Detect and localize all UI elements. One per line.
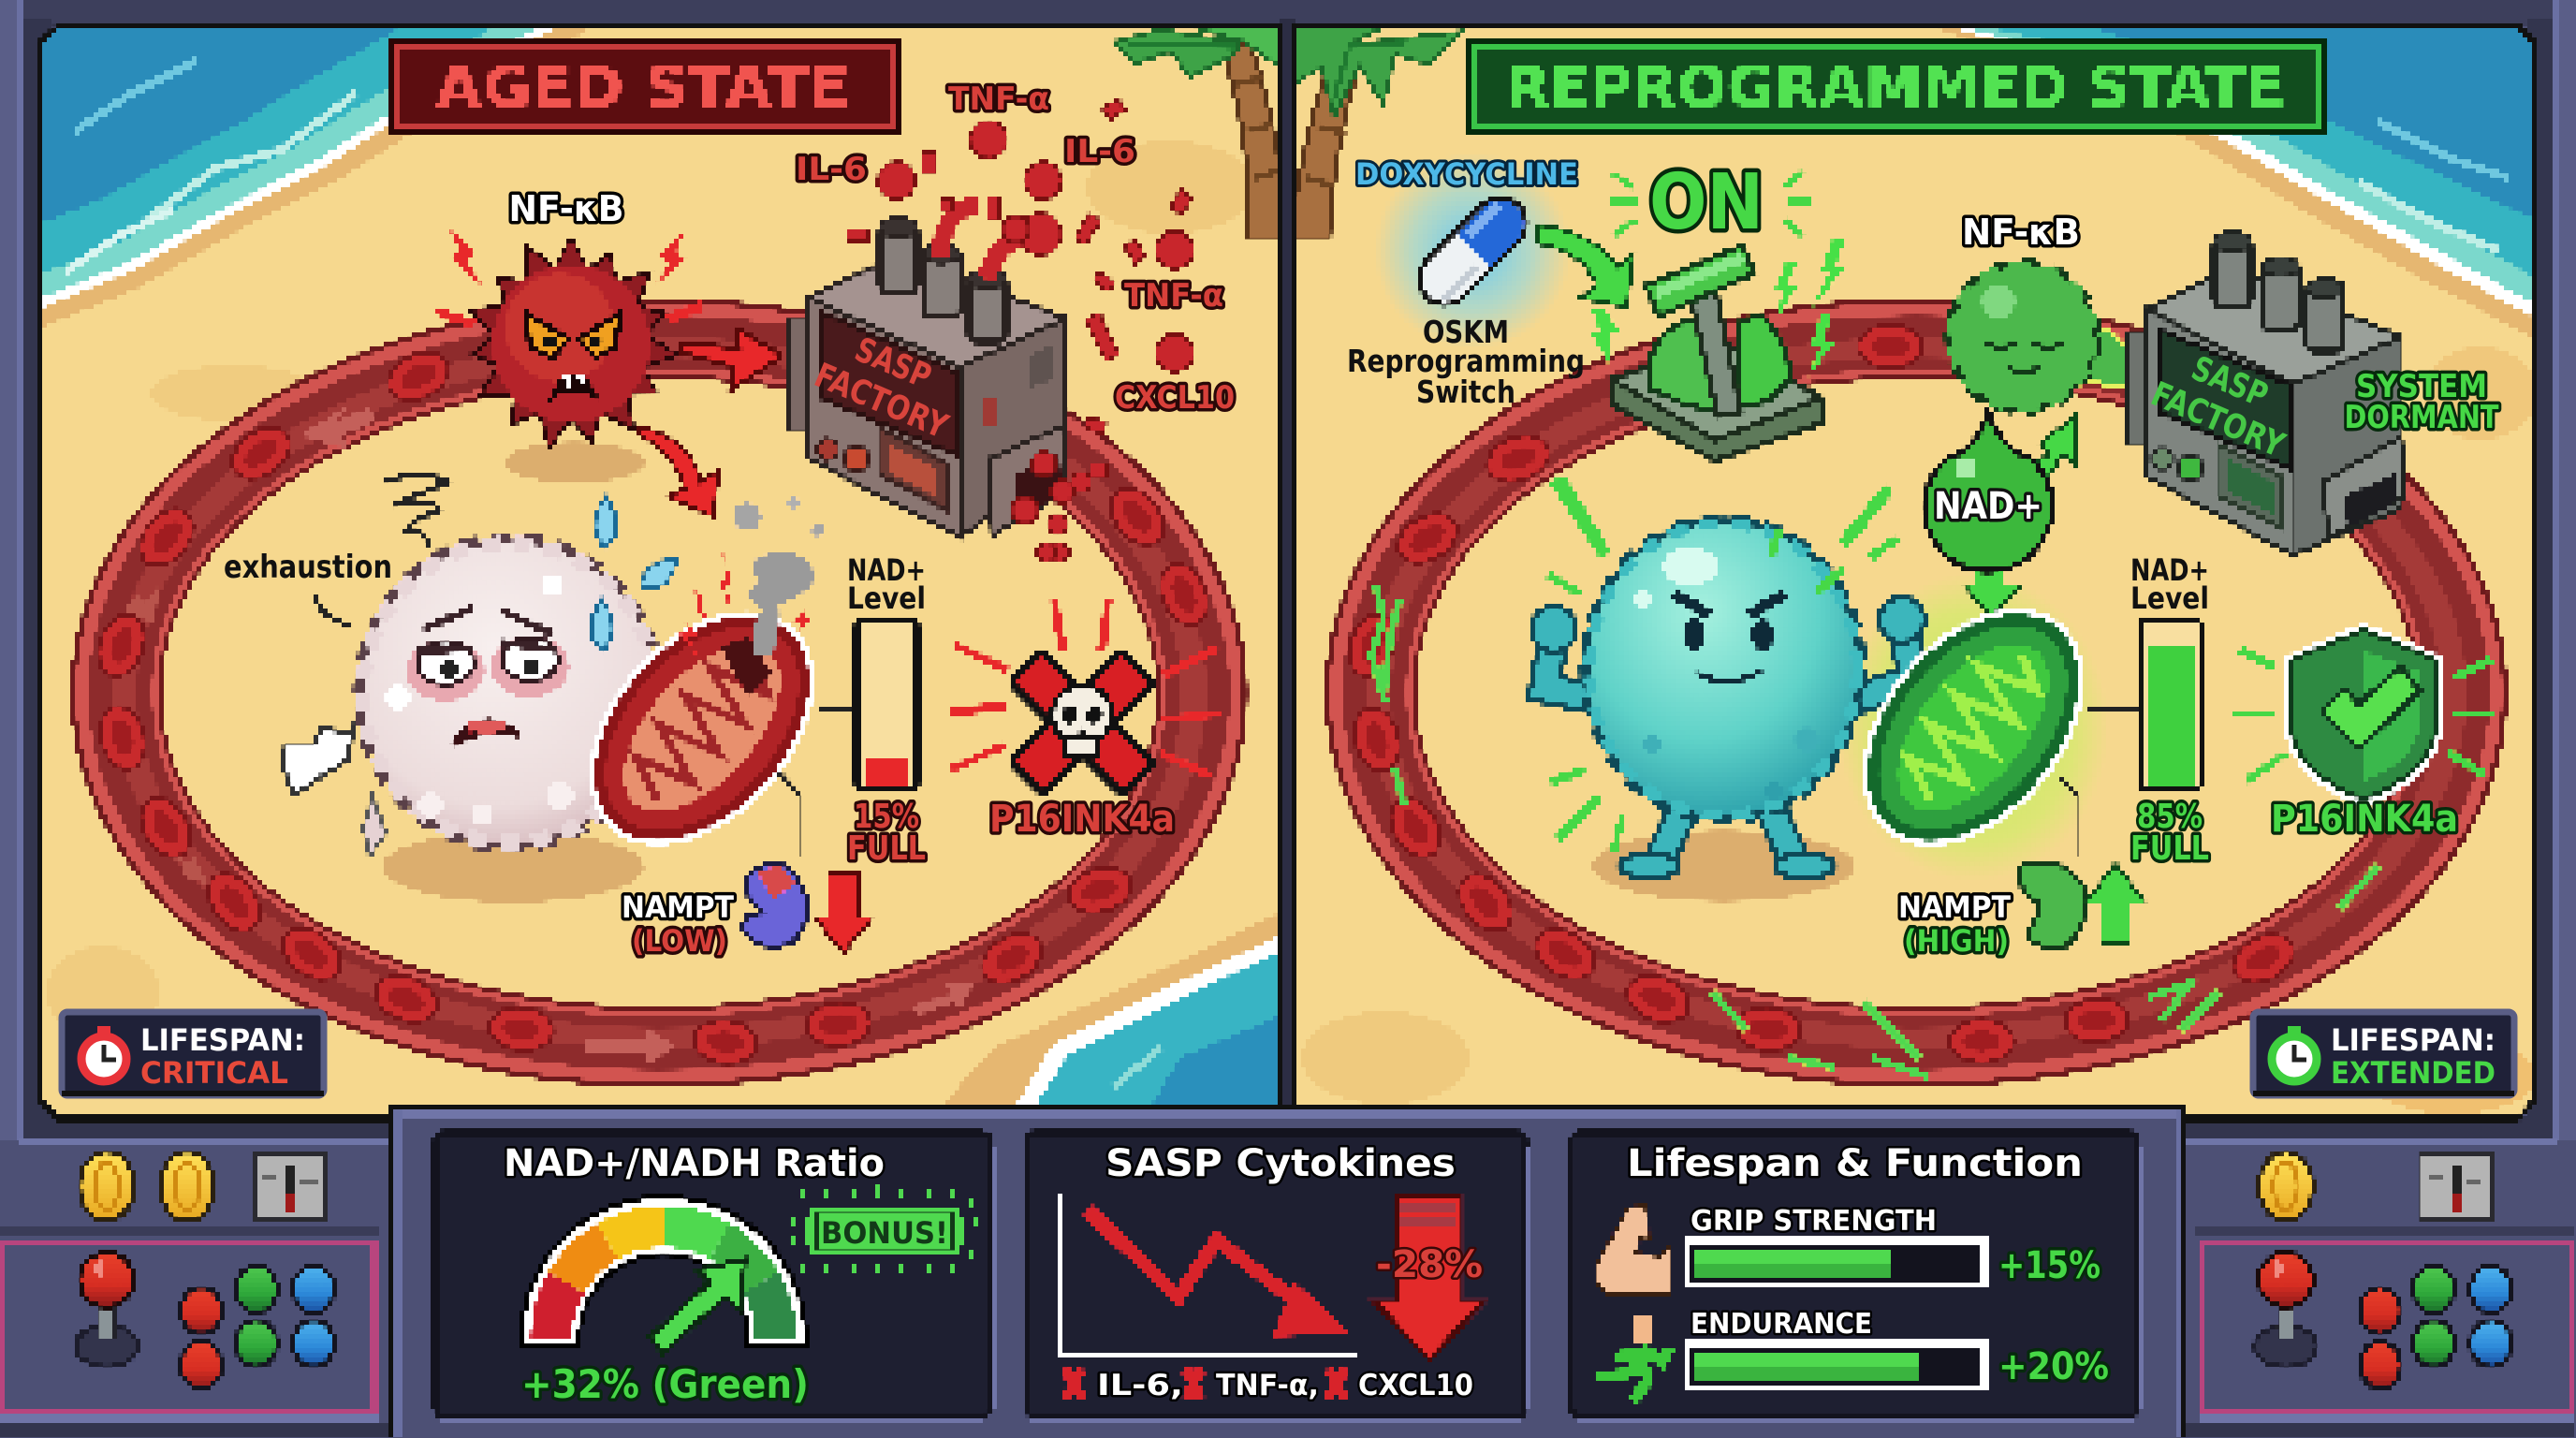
cytokine list: IL-6,: [1097, 1369, 1183, 1402]
label: sasp factory: SASP: [849, 330, 937, 397]
panel title: nad ratio: NAD+/NADH Ratio: [504, 1142, 885, 1185]
badge: lifespan extended: LIFESPAN:: [2331, 1022, 2496, 1058]
cytokine labels: TNF-α: [1124, 277, 1223, 315]
teal healthy cell: [1531, 517, 1925, 902]
label: sasp factory dormant: FACTORY: [2145, 375, 2291, 465]
nad level bar reprogrammed: [2088, 620, 2201, 789]
label: doxycycline: DOXYCYCLINE: [1355, 156, 1578, 192]
label: sasp factory: FACTORY: [809, 357, 954, 447]
label: nad level reprogrammed: NAD+: [2130, 552, 2209, 588]
label: system dormant: [2344, 368, 2499, 436]
label: oskm reprogramming switch: [1347, 314, 1585, 410]
coin: [2259, 1152, 2313, 1221]
on rays: [1611, 169, 1812, 239]
label: nampt low: NAMPT: [622, 889, 734, 925]
muscle icon: [1597, 1205, 1670, 1295]
coin: [80, 1152, 134, 1221]
label: system dormant: DORMANT: [2344, 399, 2499, 436]
label: 85 percent full: [2130, 798, 2209, 868]
cytokine list: [1097, 1369, 1473, 1402]
exhaustion bracket line: [316, 594, 351, 625]
doxycycline pill: [1374, 153, 1571, 349]
gauge value: +32% (Green): [521, 1361, 809, 1407]
big down arrow: [1374, 1196, 1485, 1359]
label: sasp factory dormant: SASP: [2186, 349, 2274, 416]
badge: lifespan critical: CRITICAL: [140, 1055, 288, 1091]
arrow to factory: [681, 328, 783, 390]
label: oskm reprogramming switch: Switch: [1416, 374, 1515, 410]
label: oskm reprogramming switch: Reprogramming: [1347, 343, 1585, 379]
grip value: +15%: [1998, 1244, 2100, 1287]
p16ink4a skull x: [950, 597, 1222, 794]
label: oskm reprogramming switch: OSKM: [1423, 314, 1509, 350]
badge: lifespan critical: [62, 1012, 324, 1096]
arrow up green: [2086, 863, 2145, 942]
label: 15 percent full: FULL: [847, 829, 926, 868]
panel backgrounds: [435, 1133, 2144, 1425]
label: nampt high: NAMPT: [1898, 889, 2011, 925]
cytokine labels: [796, 81, 1235, 417]
banner: aged state: [391, 41, 899, 132]
label: nad level aged: [847, 552, 926, 616]
panel border: [1295, 26, 2535, 1119]
gauge: [521, 1196, 806, 1354]
banner: reprogrammed state: [1469, 41, 2324, 132]
grip strength label: GRIP STRENGTH: [1690, 1205, 1937, 1238]
badge: lifespan extended: EXTENDED: [2331, 1055, 2496, 1091]
mitochondrion healthy: [1818, 566, 2129, 888]
label: nad level aged: Level: [847, 580, 926, 616]
panel border: [41, 26, 1280, 1119]
joystick: [76, 1253, 138, 1367]
arrow down red: [814, 873, 872, 953]
label: nampt low: [622, 889, 734, 959]
red x marks: [1065, 1369, 1345, 1399]
energy rays around cell: [1546, 476, 1900, 852]
bottom console: [0, 1105, 2576, 1438]
p16ink4a shield: [2232, 623, 2495, 807]
center deck: [390, 1105, 2186, 1438]
label: nf-kb: NF-κB: [509, 188, 623, 229]
bonus badge: [791, 1185, 976, 1275]
nampt connector: [2059, 777, 2078, 856]
label: on: ON: [1649, 158, 1764, 247]
label: nad level aged: NAD+: [847, 552, 926, 588]
label: nad level reprogrammed: [2130, 552, 2209, 616]
endurance bar: [1689, 1343, 1984, 1388]
grip bar: [1689, 1240, 1984, 1285]
palm tree: [1290, 26, 1460, 239]
panel title: sasp cytokines: SASP Cytokines: [1105, 1142, 1456, 1185]
coin: [160, 1152, 214, 1221]
label: nampt high: [1898, 889, 2011, 959]
label: 15 percent full: 15%: [854, 798, 919, 836]
arcade buttons: [181, 1266, 334, 1388]
label: p16ink4a aged: P16INK4a: [989, 798, 1175, 841]
meter: [2420, 1153, 2491, 1219]
meter: [255, 1153, 324, 1219]
mitochondrion glow: [1837, 573, 2109, 882]
lightning bolts: [1591, 239, 1846, 379]
label: nampt high: (HIGH): [1904, 923, 2009, 959]
badge: lifespan extended: [2253, 1012, 2514, 1096]
label: nad+ droplet: NAD+: [1934, 485, 2042, 528]
nf-kb sleeping: [1948, 262, 2133, 412]
label: 85 percent full: FULL: [2130, 829, 2209, 868]
nad+ droplet: [1925, 412, 2074, 616]
panel title: lifespan function: Lifespan & Function: [1627, 1142, 2083, 1185]
nf-kb angry virus: [463, 237, 680, 483]
sparks around nf-kb: [436, 229, 704, 328]
left control deck: [0, 1145, 393, 1438]
sweat drops: [592, 496, 678, 651]
cytokine labels: CXCL10: [1115, 379, 1235, 417]
right control deck: [2183, 1145, 2576, 1438]
label: sasp factory dormant: [2145, 339, 2305, 465]
smoke: [750, 552, 814, 655]
endurance label: ENDURANCE: [1690, 1308, 1872, 1341]
nampt low enzyme: [743, 863, 808, 946]
cytokine list: TNF-α,: [1216, 1369, 1319, 1402]
joystick: [2255, 1253, 2317, 1367]
banner: aged state: AGED STATE: [435, 53, 850, 122]
dizzy squiggle: [384, 476, 449, 548]
beach background: [41, 26, 1280, 1122]
label: nad level reprogrammed: Level: [2130, 580, 2209, 616]
arrow to mitochondrion: [640, 427, 719, 517]
mitochondrion damaged: [545, 568, 859, 888]
cytokine labels: IL-6: [1064, 133, 1135, 170]
cytokine labels: IL-6: [796, 151, 867, 188]
label: p16ink4a reprogrammed: P16INK4a: [2271, 798, 2458, 841]
endurance value: +20%: [1998, 1345, 2109, 1388]
green arrow to switch: [1538, 225, 1633, 307]
bonus label: BONUS!: [821, 1215, 948, 1251]
beach background: [1295, 26, 2537, 1122]
label: nampt low: (LOW): [632, 923, 727, 959]
sasp factory dormant: [2127, 232, 2405, 555]
exhausted white cell: [359, 538, 659, 902]
label: 15 percent full: [847, 798, 926, 868]
nampt high enzyme: [2020, 861, 2086, 947]
red sasp emissions: [847, 99, 1193, 562]
label: sasp factory: [809, 320, 969, 447]
label: system dormant: SYSTEM: [2356, 368, 2487, 405]
breath puff: [283, 726, 354, 796]
nad level bar aged: [817, 620, 917, 789]
panel: reprogrammed state: [1290, 26, 2537, 1122]
label: 85 percent full: 85%: [2137, 798, 2203, 836]
cytokine list: CXCL10: [1358, 1369, 1473, 1402]
palm tree: [1114, 26, 1288, 239]
banner: reprogrammed state: REPROGRAMMED STATE: [1505, 53, 2286, 122]
label: exhaustion: exhaustion: [224, 549, 392, 586]
sasp factory: [788, 218, 1066, 537]
minus 28 percent: -28%: [1376, 1243, 1483, 1286]
nampt connector: [780, 773, 800, 856]
badge: lifespan critical: LIFESPAN:: [140, 1022, 305, 1058]
line chart falling: [1059, 1194, 1356, 1358]
panel: aged state: [41, 26, 1288, 1122]
cytokine labels: TNF-α: [948, 81, 1049, 118]
blood vessel ring: [1325, 298, 2508, 1088]
blood vessel ring: [70, 298, 1248, 1088]
label: nf-kb sleeping: NF-κB: [1962, 212, 2080, 253]
damage sparks: [679, 552, 811, 660]
arcade buttons: [2360, 1266, 2511, 1388]
oskm switch: [1612, 245, 1822, 461]
runner icon: [1594, 1313, 1670, 1401]
